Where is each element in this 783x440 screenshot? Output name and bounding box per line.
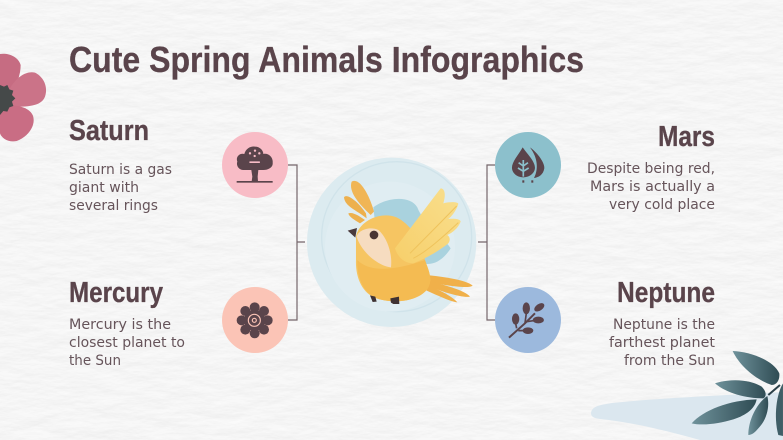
- text: Saturn description: giant with: [69, 180, 139, 196]
- text: Mercury description: the Sun: [69, 353, 121, 369]
- text: Saturn description: [69, 162, 172, 214]
- text: Neptune description: from the Sun: [624, 353, 715, 369]
- heading: Mars: Mars: [658, 121, 715, 153]
- block: Saturn: [69, 115, 172, 214]
- text: Neptune description: farthest planet: [609, 335, 716, 351]
- tail feathers: [422, 275, 473, 302]
- eye: [370, 231, 378, 239]
- face: [357, 228, 391, 267]
- text: Mercury description: [69, 317, 185, 369]
- decoration: pink flower: [0, 54, 46, 141]
- block: Mars: [587, 121, 715, 213]
- icon: flower on peach circle: [222, 287, 288, 353]
- text: Saturn description: Saturn is a gas: [69, 162, 172, 178]
- connector: right bracket: [478, 165, 495, 320]
- text: Neptune description: Neptune is the: [613, 317, 715, 333]
- text: Neptune description: [609, 317, 716, 369]
- connector: left bracket: [288, 165, 305, 320]
- decoration: blue watercolor brush stroke: [591, 392, 783, 440]
- crest feathers: [344, 181, 374, 223]
- wing: [395, 188, 461, 263]
- icon: branch on blue circle: [495, 287, 561, 353]
- feet: [370, 295, 399, 304]
- text: Mars description: [587, 161, 715, 213]
- bird: [344, 181, 473, 304]
- beak: [348, 228, 357, 238]
- heading: Mercury: Mercury: [69, 277, 163, 309]
- block: Mercury: [69, 277, 185, 369]
- text: Mercury description: closest planet to: [69, 335, 185, 351]
- illustration: bird in blue watercolor circle: [307, 158, 476, 327]
- body: [356, 215, 430, 301]
- text: Mercury description: Mercury is the: [69, 317, 171, 333]
- text: Saturn description: several rings: [69, 198, 158, 214]
- icon: tree on pink circle: [222, 132, 288, 198]
- text: Mars description: very cold place: [609, 197, 715, 213]
- heading: Saturn: Saturn: [69, 115, 149, 147]
- heading: Neptune: Neptune: [617, 277, 715, 309]
- decoration: teal leaves: [692, 351, 783, 436]
- text: Mars description: Despite being red,: [587, 161, 715, 177]
- block: Neptune: [609, 277, 716, 369]
- text: Mars description: Mars is actually a: [590, 179, 715, 195]
- watercolor circle: [307, 158, 476, 327]
- icon: leaf drops on teal circle: [495, 132, 561, 198]
- title: Cute Spring Animals Infographics: [69, 39, 584, 80]
